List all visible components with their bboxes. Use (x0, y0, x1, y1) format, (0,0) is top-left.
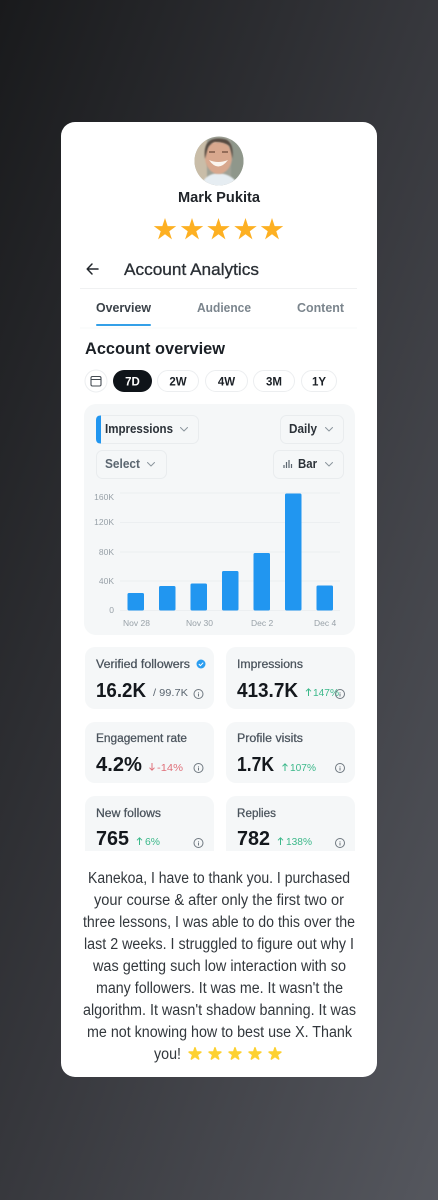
emoji stars (189, 1048, 281, 1059)
testimonial text: last 2 weeks. I struggled to figure out why I (84, 936, 354, 953)
date range pills: 4W (218, 376, 235, 388)
tabs: Content (297, 300, 345, 315)
date range pills: 7D (125, 376, 140, 388)
reviewer name: Mark Pukita (178, 190, 261, 206)
testimonial text (83, 870, 356, 1063)
testimonial text: you! (154, 1046, 181, 1063)
metric: profile visits: Profile visits (237, 733, 303, 745)
icon: back arrow (87, 264, 98, 274)
bar chart (94, 492, 340, 628)
metric: profile visits: 107% (290, 762, 316, 774)
testimonial text: me not knowing how to best use X. Thank (87, 1024, 352, 1041)
bar chart: Dec 4 (314, 618, 336, 628)
metric: engagement rate (85, 722, 214, 783)
testimonial text: algorithm. It wasn't shadow banning. It was (83, 1002, 356, 1019)
bar chart: 80K (99, 547, 114, 557)
bar chart: 160K (94, 492, 114, 502)
metric: engagement rate: -14% (157, 762, 183, 774)
testimonial text: Kanekoa, I have to thank you. I purchased (88, 870, 350, 887)
bar chart: 120K (94, 517, 114, 527)
five star rating (154, 218, 283, 239)
metric: replies (226, 796, 355, 851)
metric: new follows (85, 796, 214, 851)
dropdown: daily (280, 416, 344, 444)
testimonial text: many followers. It was me. It wasn't the (96, 980, 343, 997)
panel: impressions chart (84, 404, 355, 635)
bar chart: 0 (109, 605, 114, 615)
dropdown: bar: Bar (298, 457, 317, 471)
bar chart: Nov 30 (186, 618, 213, 628)
metric: replies: 782 (237, 828, 270, 850)
metric: replies: Replies (237, 808, 276, 820)
metric: new follows: 6% (145, 836, 160, 848)
metric: verified followers: / 99.7K (153, 687, 188, 699)
tabs (96, 300, 345, 326)
metric: engagement rate: Engagement rate (96, 733, 187, 745)
bar chart: Dec 2 (251, 618, 273, 628)
metric: verified followers: 16.2K (96, 680, 147, 702)
metric: verified followers (85, 647, 214, 709)
testimonial text: your course & after only the first two or (94, 892, 344, 909)
tabs: Overview (96, 300, 152, 315)
bar chart: 40K (99, 576, 114, 586)
date range pills: 1Y (312, 376, 326, 388)
date range pills: 3M (266, 376, 282, 388)
dropdown: select: Select (105, 457, 141, 471)
dropdown: impressions (96, 416, 198, 444)
panel: testimonial card (61, 122, 377, 1077)
date range pills (85, 370, 336, 392)
metric: new follows: New follows (96, 808, 161, 820)
metric: verified followers: Verified followers (96, 659, 190, 671)
metric: engagement rate: 4.2% (96, 754, 142, 776)
metric: impressions (226, 647, 355, 709)
screen title: Account Analytics (124, 260, 259, 279)
tabs: Audience (197, 300, 251, 315)
infographic canvas (61, 122, 377, 1077)
dropdown: bar (274, 450, 344, 478)
metric cards grid (85, 647, 355, 866)
metric: impressions: Impressions (237, 659, 303, 671)
testimonial text: three lessons, I was able to do this over the (83, 914, 355, 931)
dropdown: daily: Daily (289, 422, 317, 436)
metric: impressions: 413.7K (237, 680, 299, 702)
metric: replies: 138% (286, 836, 312, 848)
testimonial text: was getting such low interaction with so (92, 958, 346, 975)
metric: profile visits: 1.7K (237, 754, 274, 776)
bar chart: Nov 28 (123, 618, 150, 628)
date range pills: 2W (169, 376, 187, 388)
dropdown: select (96, 450, 166, 478)
metric: new follows: 765 (96, 828, 129, 850)
metric: profile visits (226, 722, 355, 783)
avatar photo (194, 136, 244, 186)
metric: impressions: 147% (313, 687, 339, 699)
section heading: Account overview (85, 339, 226, 358)
dropdown: impressions: Impressions (105, 422, 173, 436)
